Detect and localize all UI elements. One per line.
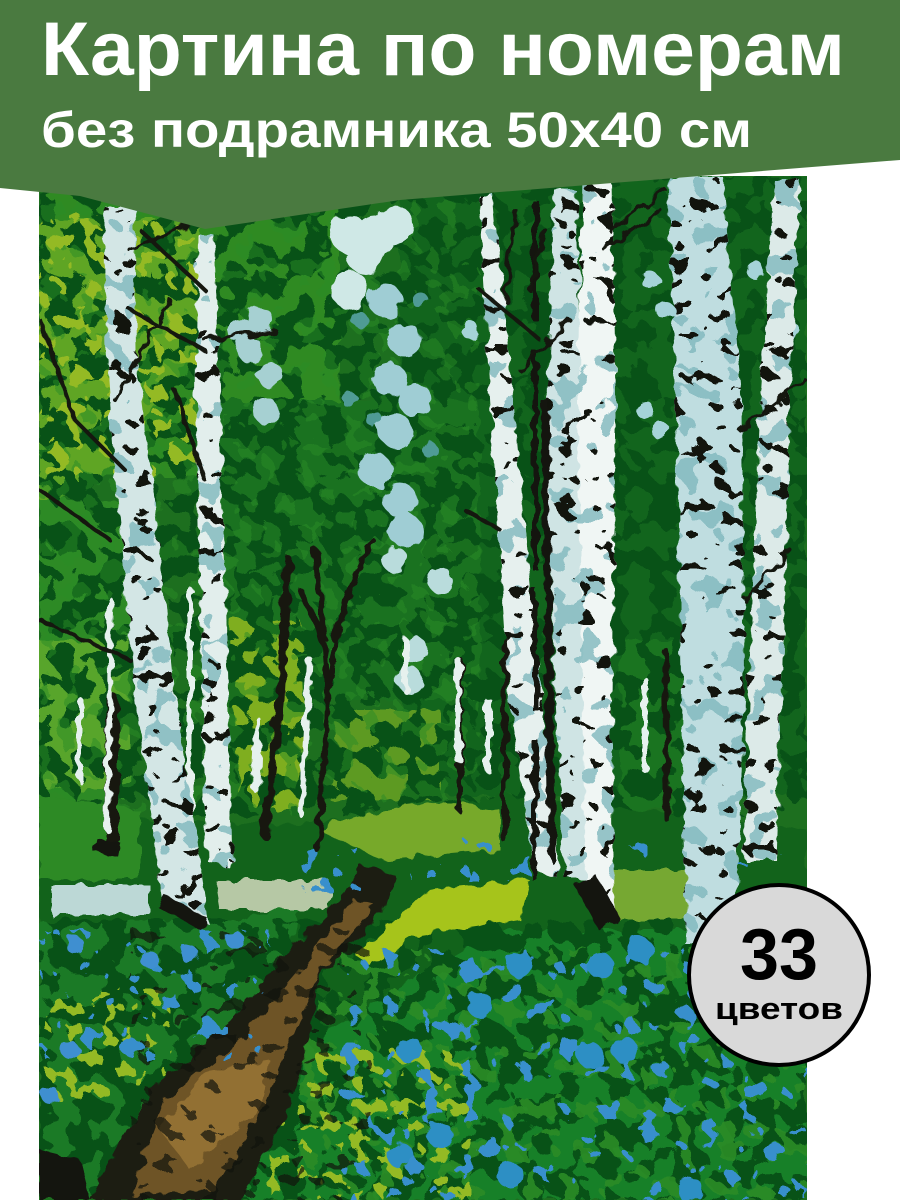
far glade <box>230 620 690 810</box>
banner shape <box>0 0 900 229</box>
meadow ground <box>39 795 807 1200</box>
birch bark black marks <box>104 177 798 926</box>
small pale trunks <box>80 590 645 830</box>
foliage dabs: yellow, upper left <box>39 215 214 475</box>
birch bark tone <box>104 176 802 933</box>
badge caption: цветов <box>715 991 843 1026</box>
dirt path <box>39 865 395 1200</box>
title: Картина по номерам <box>41 7 845 92</box>
badge number: 33 <box>740 915 818 995</box>
painting: birch forest <box>39 176 807 1200</box>
birch trunks <box>104 176 800 945</box>
badge: 33 colours <box>689 885 869 1065</box>
foliage dabs: dark <box>39 176 807 816</box>
foliage background <box>39 176 807 800</box>
top banner <box>0 0 900 229</box>
thin dark background trunks <box>112 540 668 850</box>
meadow dabs <box>39 880 807 1200</box>
tree branches <box>40 190 805 660</box>
sky patches <box>240 225 790 680</box>
subtitle: без подрамника 50х40 см <box>41 102 752 158</box>
dark trunk edges and bases <box>95 200 610 925</box>
foliage dabs: mid green <box>39 176 479 816</box>
bluebell flowers <box>39 835 807 1200</box>
